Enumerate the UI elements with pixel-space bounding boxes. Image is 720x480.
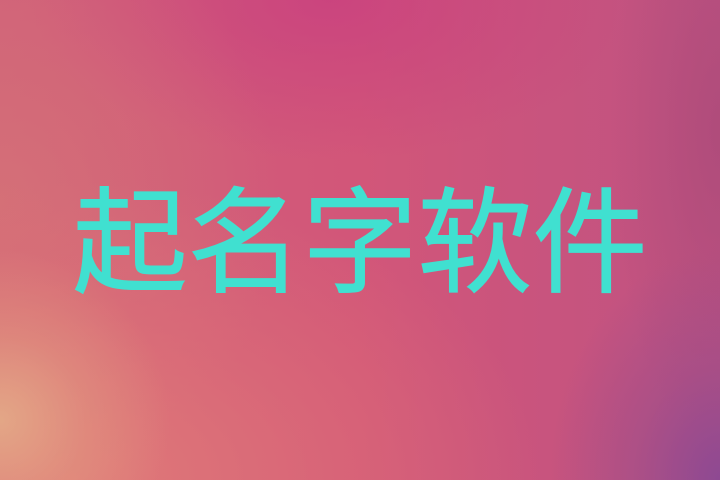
title: 起名字软件 (72, 180, 648, 308)
